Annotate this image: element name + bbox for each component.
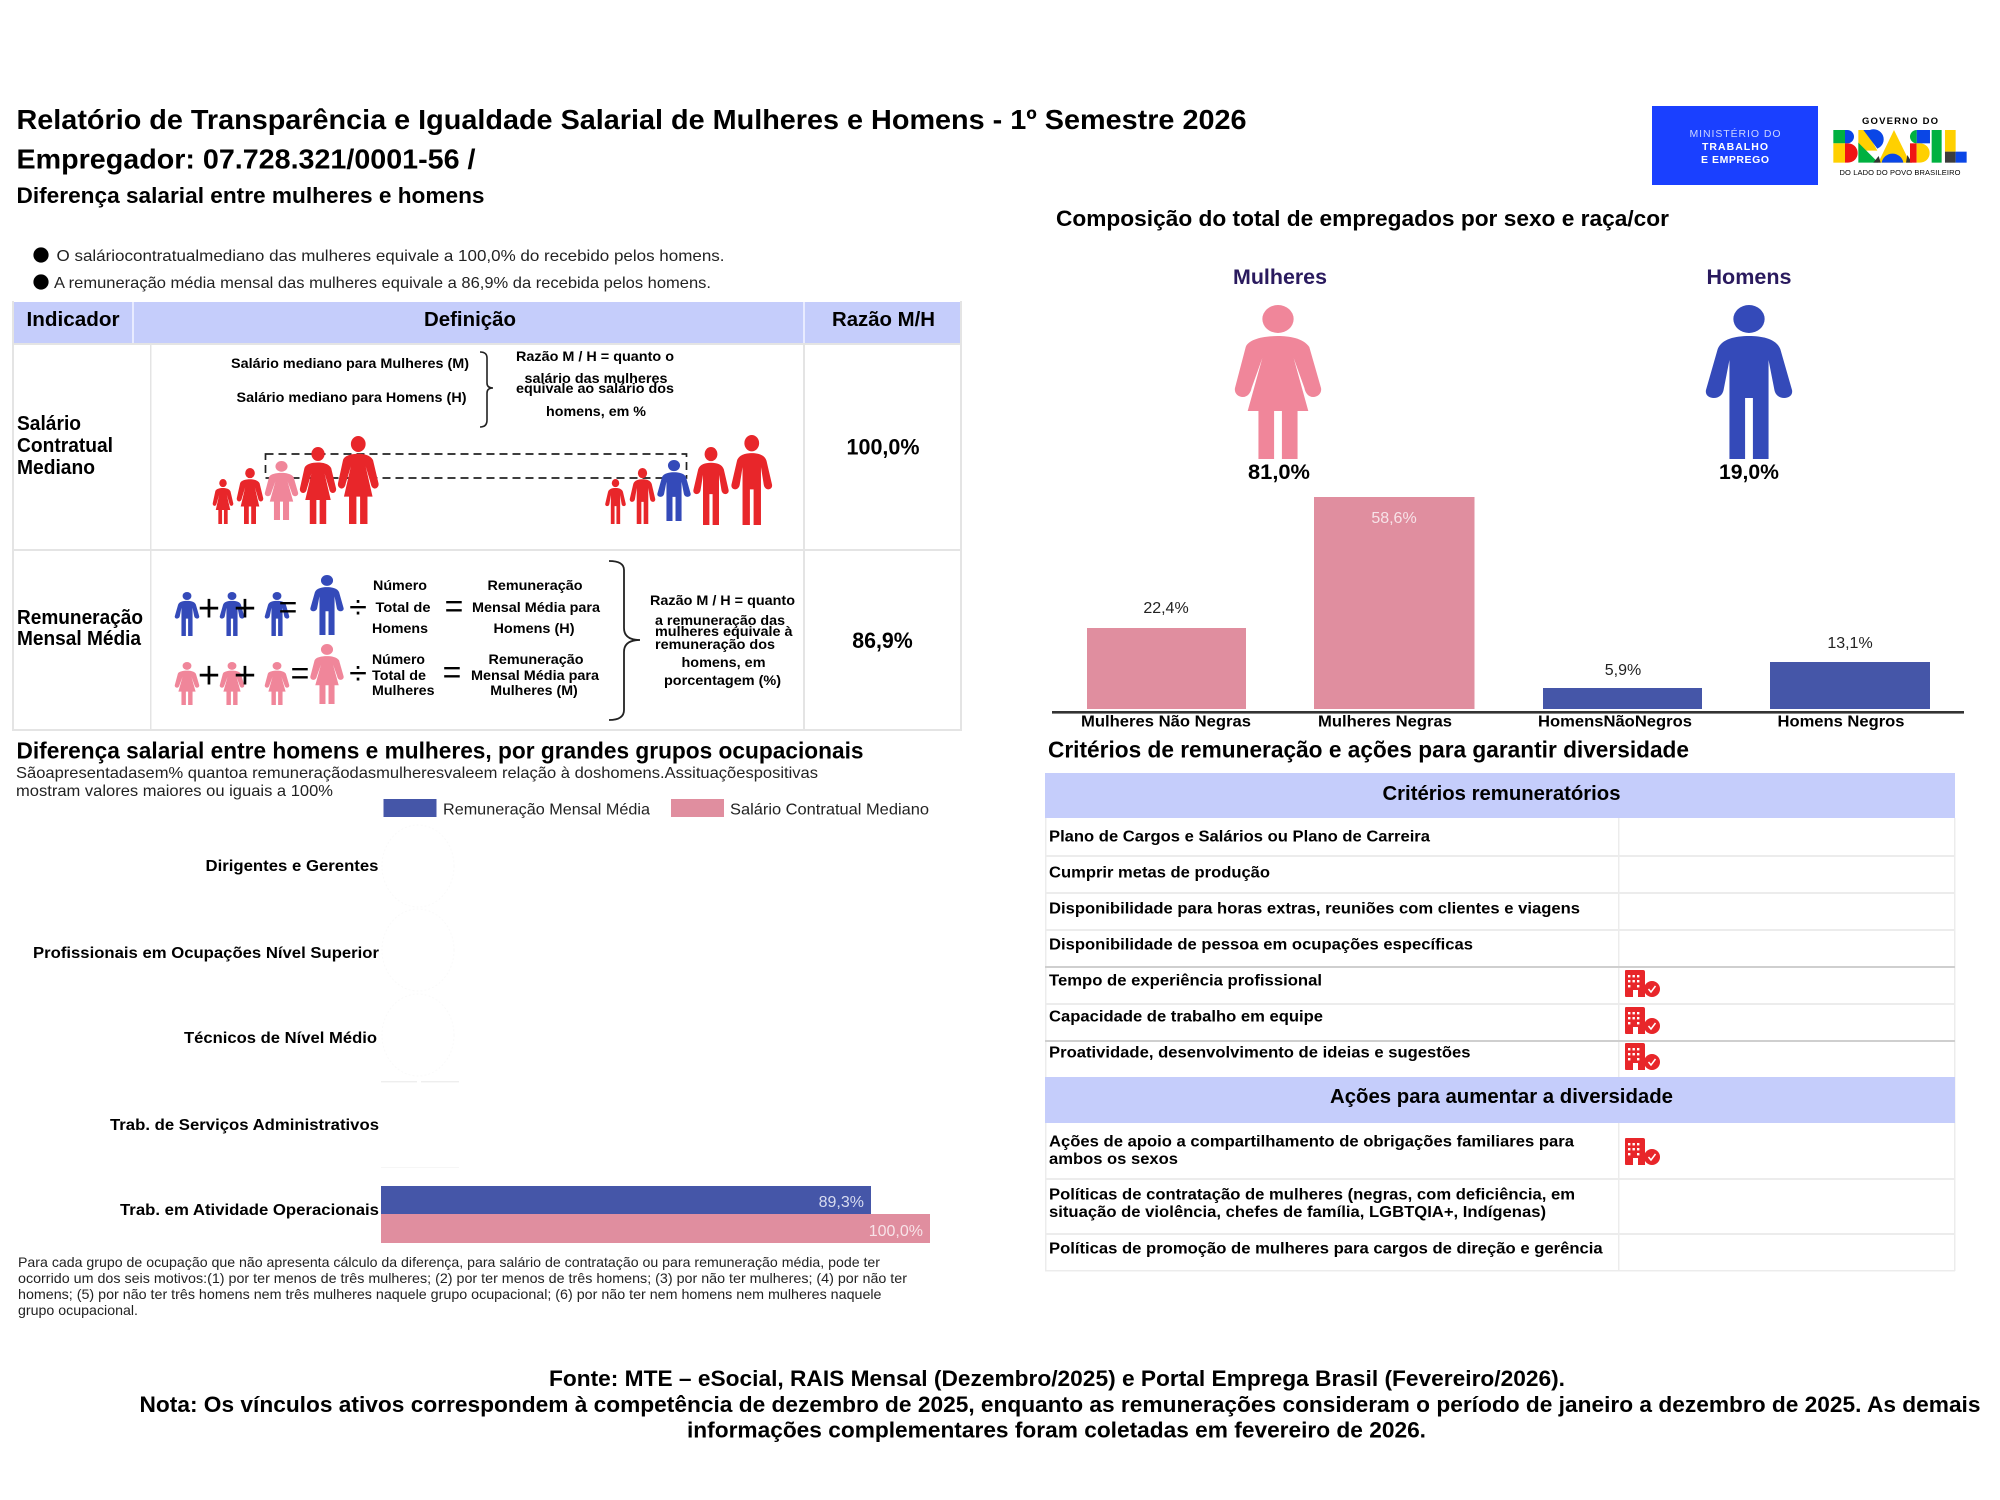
- heading: wage difference: Diferença salarial entre mulheres e homens: [16, 183, 485, 208]
- ratio value: median salary: 100,0%: [846, 434, 920, 460]
- brace and ratio explanation: average pay: [609, 561, 795, 720]
- column labels: Mulheres Não Negras: [1081, 714, 1251, 730]
- legend: [384, 799, 929, 818]
- formula: women: ÷: [349, 655, 367, 691]
- section header: remuneration criteria: [1045, 773, 1955, 818]
- formula: men: +: [198, 588, 220, 630]
- criteria rows: Tempo de experiência profissional: [1049, 972, 1322, 990]
- formula: men: =: [445, 588, 463, 624]
- panel: indicator table: [12, 301, 962, 731]
- row label: median contractual salary: [17, 413, 113, 479]
- column: non-black women: [1087, 600, 1246, 709]
- bar: average pay: 89,3%: [819, 1194, 864, 1211]
- column labels: Homens Negros: [1778, 714, 1905, 730]
- section header: remuneration criteria: Critérios remuneratórios: [1382, 783, 1620, 805]
- formula: women: Total de: [372, 667, 426, 683]
- criteria rows: [1049, 828, 1580, 1062]
- heading: criteria: Critérios de remuneração e ações para garantir diversidade: [1048, 736, 1689, 762]
- employer line: Empregador: 07.728.321/0001-56 /: [16, 144, 476, 174]
- column: black men: [1770, 635, 1930, 709]
- column: black women: [1314, 497, 1474, 709]
- row label: median contractual salary: Contratual: [17, 435, 113, 457]
- logo: governo do brasil: [1833, 116, 1967, 177]
- formula: men: Número: [373, 577, 427, 593]
- footer: source and note: informações complementares foram coletadas em fevereiro de 2026.: [687, 1418, 1426, 1442]
- formula: women: Mulheres (M): [490, 682, 578, 698]
- formula: men: ÷: [349, 589, 367, 625]
- table header: Razão M/H: [832, 309, 935, 331]
- definition text: median salary: Salário mediano para Mulheres (M): [231, 355, 469, 371]
- action rows: Políticas de contratação de mulheres (negras, com deficiência, em: [1049, 1186, 1575, 1204]
- category labels: Técnicos de Nível Médio: [184, 1030, 377, 1047]
- formula: men: Total de: [376, 599, 431, 615]
- formula: men: [175, 575, 600, 636]
- diagram: median person in ordered groups: [213, 435, 772, 525]
- row label: average monthly pay: Mensal Média: [17, 628, 142, 650]
- subheading: occupational groups: [16, 765, 818, 800]
- action rows: situação de violência, chefes de família, LGBTQIA+, Indígenas): [1049, 1204, 1546, 1221]
- formula: women: =: [291, 655, 309, 691]
- action rows: [1049, 1134, 1603, 1258]
- heading: composition: Composição do total de empregados por sexo e raça/cor: [1056, 206, 1669, 231]
- action rows: ambos os sexos: [1049, 1151, 1178, 1168]
- action rows: Ações de apoio a compartilhamento de obrigações familiares para: [1049, 1134, 1574, 1150]
- brace and ratio explanation: average pay: a remuneração das: [655, 612, 785, 628]
- criteria rows: Proatividade, desenvolvimento de ideias e sugestões: [1049, 1044, 1471, 1062]
- formula: men: =: [279, 589, 297, 625]
- row label: average monthly pay: Remuneração: [17, 607, 143, 629]
- footer: source and note: Fonte: MTE – eSocial, RAIS Mensal (Dezembro/2025) e Portal Emprega Brasil (Fevereiro/2026).: [549, 1366, 1565, 1391]
- logo: ministry panel: TRABALHO: [1702, 141, 1768, 153]
- definition text: median salary: salário das mulheres: [524, 370, 668, 386]
- bar chart: occupational groups: [33, 825, 930, 1243]
- definition text: median salary: [231, 348, 674, 427]
- row label: average monthly pay: [17, 607, 143, 650]
- criteria rows: Disponibilidade de pessoa em ocupações específicas: [1049, 936, 1473, 954]
- icon: company check: [1625, 1007, 1660, 1034]
- definition text: median salary: equivale ao salário dos: [516, 380, 674, 396]
- brace and ratio explanation: average pay: remuneração dos: [655, 636, 775, 652]
- brace and ratio explanation: average pay: mulheres equivale à: [655, 623, 793, 639]
- men share: 19,0%: [1719, 461, 1779, 484]
- logo: governo do brasil: DO LADO DO POVO BRASILEIRO: [1840, 168, 1961, 177]
- formula: women: Número: [372, 651, 425, 667]
- ratio value: average pay: 86,9%: [852, 628, 913, 653]
- footnote: grupo ocupacional.: [18, 1302, 138, 1318]
- heading: occupational groups: Diferença salarial entre homens e mulheres, por grandes grupos ocupacionais: [16, 738, 864, 764]
- category labels: [33, 858, 379, 1219]
- row label: median contractual salary: Salário: [17, 413, 81, 435]
- column labels: HomensNãoNegros: [1538, 714, 1692, 730]
- brace and ratio explanation: average pay: Razão M / H = quanto: [650, 592, 795, 608]
- section header: diversity actions: [1045, 1077, 1955, 1123]
- column chart: sex and race: [1052, 497, 1964, 730]
- formula: women: +: [198, 655, 220, 697]
- table header: Indicador: [26, 309, 120, 331]
- bullet: mean pay: A remuneração média mensal das mulheres equivale a 86,9% da recebida pelos homens.: [54, 275, 711, 292]
- category labels: Trab. em Atividade Operacionais: [120, 1202, 379, 1219]
- formula: women: Mulheres: [372, 682, 435, 698]
- criteria rows: Capacidade de trabalho em equipe: [1049, 1008, 1323, 1026]
- men share: [1706, 266, 1792, 484]
- category labels: Trab. de Serviços Administrativos: [110, 1117, 379, 1134]
- footnote: ocorrido um dos seis motivos:(1) por ter menos de três mulheres; (2) por ter menos de três homens; (3) por não ter mulheres; (4) por não ter: [18, 1270, 907, 1286]
- logo: ministry panel: [1652, 106, 1818, 185]
- legend: Remuneração Mensal Média: [443, 802, 650, 818]
- column: non-black men: 5,9%: [1605, 662, 1641, 679]
- bar: average pay: [381, 1186, 871, 1214]
- women share: Mulheres: [1233, 266, 1327, 289]
- criteria rows: Disponibilidade para horas extras, reuniões com clientes e viagens: [1049, 900, 1580, 918]
- logo: ministry panel: E EMPREGO: [1701, 154, 1769, 166]
- formula: women: Mensal Média para: [471, 667, 599, 683]
- brace and ratio explanation: average pay: porcentagem (%): [664, 672, 781, 688]
- footer: source and note: Nota: Os vínculos ativos correspondem à competência de dezembro de 2025, enquanto as remunerações consideram o período de janeiro a dezembro de 2025. As demais: [140, 1392, 1980, 1417]
- title: Relatório de Transparência e Igualdade Salarial de Mulheres e Homens - 1º Semestre 2026: [16, 104, 1246, 135]
- footnote: homens; (5) por não ter três homens nem três mulheres naquele grupo ocupacional; (6) por não ter nem homens nem mulheres naquele: [18, 1286, 882, 1302]
- icon: company check: [1625, 1138, 1660, 1165]
- column: black women: 58,6%: [1371, 510, 1417, 527]
- bar: median salary: [381, 1214, 930, 1243]
- formula: women: +: [234, 655, 256, 697]
- row label: median contractual salary: Mediano: [17, 457, 95, 479]
- women share: [1233, 266, 1327, 484]
- formula: women: =: [443, 654, 461, 690]
- column labels: Mulheres Negras: [1318, 714, 1452, 730]
- criteria rows: Plano de Cargos e Salários ou Plano de Carreira: [1049, 828, 1430, 846]
- icon: company check: [1625, 970, 1660, 997]
- subheading: occupational groups: mostram valores maiores ou iguais a 100%: [16, 783, 333, 800]
- women share: 81,0%: [1248, 461, 1310, 484]
- formula: women: [175, 644, 599, 705]
- formula: men: Mensal Média para: [472, 599, 600, 615]
- brace and ratio explanation: average pay: homens, em: [682, 654, 766, 670]
- legend: Salário Contratual Mediano: [730, 802, 929, 818]
- table header: [13, 302, 961, 343]
- bar: median salary: 100,0%: [869, 1223, 923, 1240]
- logo: ministry and government: [1652, 106, 1967, 185]
- table header: Definição: [424, 309, 516, 331]
- column labels: [1081, 714, 1905, 730]
- bullet: median salary: O saláriocontratualmediano das mulheres equivale a 100,0% do recebido pelos homens.: [56, 248, 724, 265]
- column: black men: 13,1%: [1827, 635, 1873, 652]
- definition text: median salary: homens, em %: [546, 403, 647, 419]
- formula: women: Remuneração: [488, 651, 584, 667]
- formula: men: +: [234, 588, 256, 630]
- footnote: [18, 1254, 907, 1318]
- section header: diversity actions: Ações para aumentar a diversidade: [1330, 1086, 1673, 1108]
- category labels: Profissionais em Ocupações Nível Superior: [33, 945, 379, 962]
- column: non-black women: 22,4%: [1143, 600, 1189, 617]
- formula: men: Homens (H): [494, 620, 574, 636]
- category labels: Dirigentes e Gerentes: [206, 858, 379, 875]
- column: non-black men: [1543, 662, 1702, 709]
- logo: governo do brasil: GOVERNO DO: [1862, 116, 1938, 127]
- footnote: Para cada grupo de ocupação que não apresenta cálculo da diferença, para salário de contratação ou para remuneração média, pode ter: [18, 1254, 880, 1270]
- criteria rows: Cumprir metas de produção: [1049, 864, 1270, 882]
- definition text: median salary: Razão M / H = quanto o: [516, 348, 674, 364]
- action rows: Políticas de promoção de mulheres para cargos de direção e gerência: [1049, 1240, 1603, 1258]
- definition text: median salary: Salário mediano para Homens (H): [236, 389, 466, 405]
- formula: men: Homens: [372, 620, 428, 636]
- icon: company check: [1625, 1043, 1660, 1070]
- men share: Homens: [1706, 266, 1792, 289]
- formula: men: Remuneração: [488, 577, 582, 593]
- logo: ministry panel: MINISTÉRIO DO: [1690, 127, 1780, 140]
- subheading: occupational groups: Sãoapresentadasem% quantoa remuneraçãodasmulheresvaleem relação à doshomens.Assituaçõespositivas: [16, 765, 818, 782]
- footer: source and note: [140, 1366, 1980, 1442]
- panel: criteria table: [1045, 773, 1956, 1272]
